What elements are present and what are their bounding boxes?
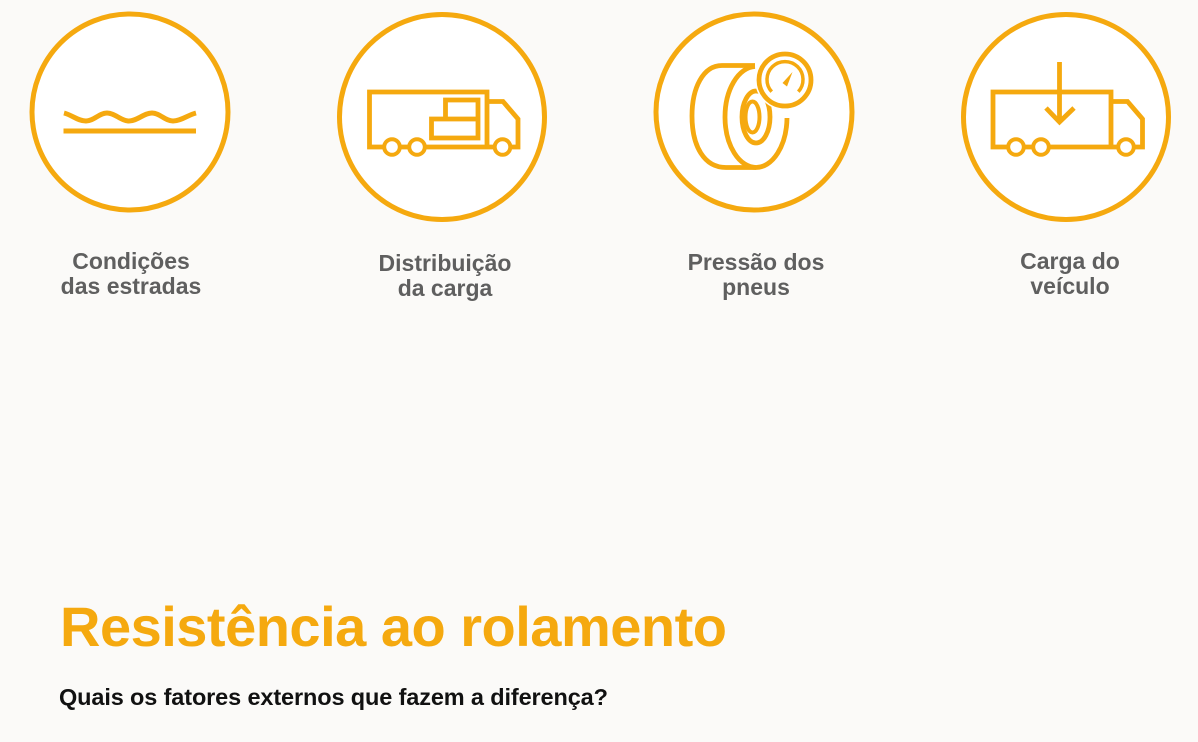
label: load distribution: Distribuição [379,250,511,276]
label: road conditions: das estradas [61,273,201,299]
label: tyre pressure: Pressão dos [688,249,824,275]
icon: road conditions [32,14,228,210]
icon: tyre pressure [656,14,852,210]
label: vehicle load [1020,248,1120,299]
label: vehicle load: Carga do [1020,248,1120,274]
label: load distribution [379,250,511,301]
subtitle: Quais os fatores externos que fazem a diferença? [59,684,608,710]
label: load distribution: da carga [398,275,492,301]
icon: vehicle load truck [964,14,1168,220]
icon: load distribution truck [340,14,544,220]
label: road conditions: Condições [72,248,190,274]
label: tyre pressure: pneus [722,274,790,300]
label: tyre pressure [688,249,824,300]
title: Resistência ao rolamento [60,595,726,658]
label: vehicle load: veículo [1030,273,1110,299]
label: road conditions [61,248,201,299]
